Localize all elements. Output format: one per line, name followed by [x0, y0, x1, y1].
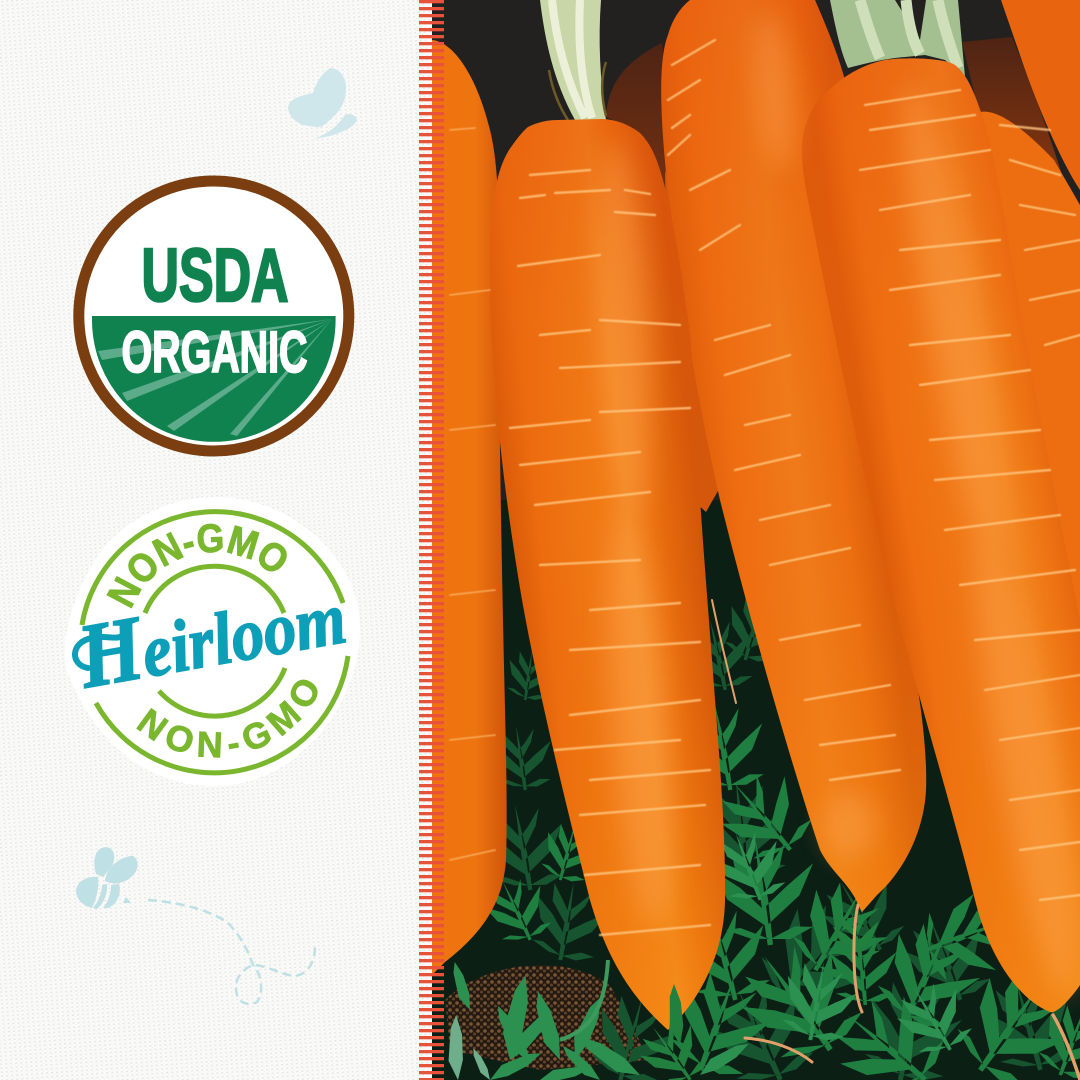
- Heirloom swash: [75, 636, 122, 668]
- panel: fabric background: [0, 0, 432, 1080]
- USDA text: USDA: [142, 233, 288, 317]
- badge white backing: [64, 497, 360, 786]
- carrot centre-right: [661, 0, 926, 912]
- carrot skin streaks: [450, 40, 1080, 935]
- carrot far right top: [1001, 0, 1080, 190]
- dashed flight trail: [148, 900, 315, 1004]
- NON-GMO curved bottom: NON-GMO: [136, 680, 318, 758]
- panel: carrot photo: [432, 0, 1080, 1080]
- stems right: [830, 0, 965, 77]
- Heirloom script: Heirloom: [70, 561, 352, 708]
- carrot left edge: [432, 40, 507, 975]
- carrot main centre: [490, 119, 725, 1030]
- outer ring arcs: [82, 512, 348, 773]
- dark upper background: [432, 0, 1080, 520]
- foreground leaves: [631, 906, 885, 1080]
- carrot right behind: [980, 112, 1080, 640]
- ORGANIC text: ORGANIC: [122, 320, 308, 385]
- brown shade right: [962, 37, 1062, 173]
- seal green field: [92, 316, 336, 442]
- NON-GMO curved top: NON-GMO: [106, 524, 287, 608]
- dark lower background: [432, 500, 1080, 1080]
- seal rays: [98, 319, 332, 436]
- stem left: [540, 0, 606, 120]
- carrot behind centre: [665, 170, 718, 512]
- inner ring arcs: [145, 566, 285, 716]
- carrot big right: [802, 58, 1080, 1012]
- icon: bee with dashed trail: [76, 847, 315, 1004]
- carrot highlights: [591, 9, 1080, 1001]
- badge: USDA Organic: [79, 181, 349, 451]
- carrot foliage: [445, 590, 1080, 1080]
- carrot roots: [712, 600, 1080, 1080]
- badge: Non-GMO Heirloom: [64, 497, 360, 786]
- bee wings and body: [76, 847, 138, 909]
- striped border: [419, 0, 444, 1080]
- seal ring: [79, 181, 349, 451]
- soil: [445, 965, 650, 1070]
- icon: butterfly: [288, 68, 357, 139]
- brown shade left: [606, 43, 666, 190]
